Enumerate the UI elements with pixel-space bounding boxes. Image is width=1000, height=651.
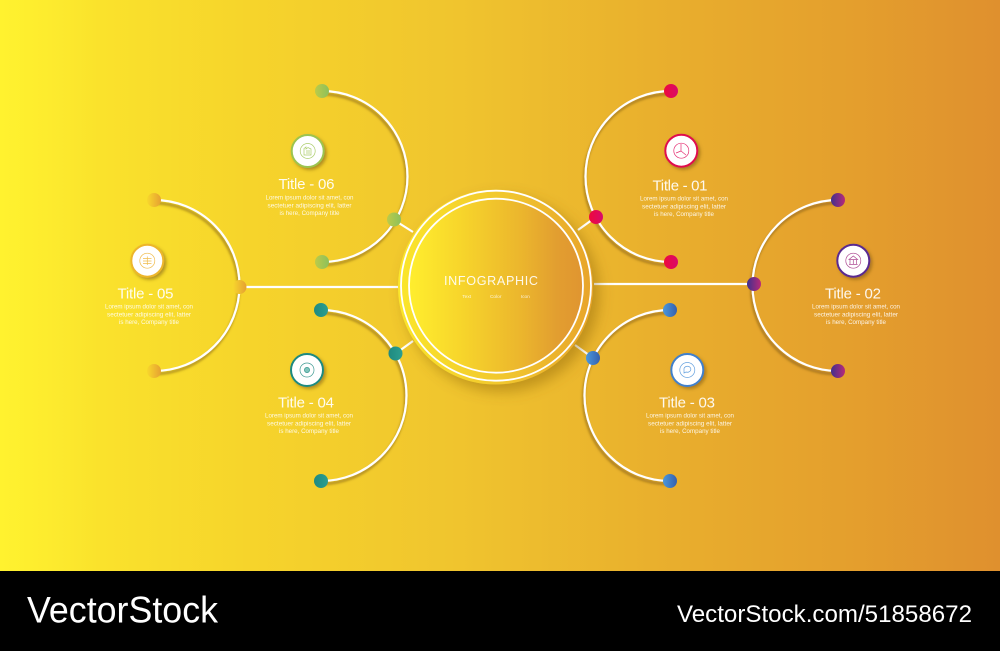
center sub labels: Icon <box>521 294 530 300</box>
text block <box>265 412 354 435</box>
center circle <box>398 190 593 384</box>
panel: title 06 <box>266 84 408 269</box>
center sub labels: Color <box>490 294 502 300</box>
text block: Lorem ipsum dolor sit amet, con <box>266 194 354 202</box>
text block: is here, Company title <box>660 428 721 435</box>
text block <box>105 304 194 326</box>
text block <box>646 412 735 435</box>
panel: title 02 <box>747 193 901 378</box>
panel: title 04 <box>265 303 406 488</box>
heading: Title - 04 <box>278 394 334 412</box>
text block <box>266 194 354 217</box>
panel: title 01 <box>586 84 729 269</box>
text block: is here, Company title <box>119 319 180 326</box>
text block: sectetuer adipiscing elit, latter <box>107 311 191 318</box>
text block: is here, Company title <box>826 319 887 326</box>
heading: Title - 01 <box>652 178 708 194</box>
heading: Title - 06 <box>278 176 334 193</box>
icon: clock <box>665 135 697 167</box>
text block <box>640 196 729 218</box>
text block: Lorem ipsum dolor sit amet, con <box>105 304 194 310</box>
icon: sliders <box>131 245 163 277</box>
heading: Title - 05 <box>118 286 174 302</box>
text block: Lorem ipsum dolor sit amet, con <box>646 412 735 420</box>
text block: Lorem ipsum dolor sit amet, con <box>265 412 354 420</box>
text block: is here, Company title <box>280 210 340 217</box>
text block: sectetuer adipiscing elit, latter <box>267 420 351 427</box>
icon: target <box>291 354 323 386</box>
footer bar <box>0 571 1000 651</box>
text block: Lorem ipsum dolor sit amet, con <box>640 196 729 202</box>
heading: Title - 02 <box>825 286 881 302</box>
text block: sectetuer adipiscing elit, latter <box>814 311 898 318</box>
panel: title 03 <box>584 303 735 488</box>
icon: chat <box>671 354 703 386</box>
text block: is here, Company title <box>279 428 340 435</box>
center heading: INFOGRAPHIC <box>444 274 538 288</box>
footer logo: VectorStock <box>27 590 218 630</box>
center sub labels: Text <box>462 294 472 300</box>
text block: sectetuer adipiscing elit, latter <box>648 420 732 427</box>
text block: Lorem ipsum dolor sit amet, con <box>812 304 901 310</box>
footer url: VectorStock.com/51858672 <box>677 601 972 628</box>
icon: building <box>292 135 324 167</box>
text block: sectetuer adipiscing elit, latter <box>642 203 726 210</box>
icon: bank <box>837 245 869 277</box>
connector lines to center <box>240 217 754 358</box>
panel: title 05 <box>105 193 246 378</box>
text block: is here, Company title <box>654 211 715 218</box>
heading: Title - 03 <box>659 394 715 412</box>
text block: sectetuer adipiscing elit, latter <box>268 202 352 209</box>
text block <box>812 304 901 326</box>
center sub labels <box>462 294 530 300</box>
